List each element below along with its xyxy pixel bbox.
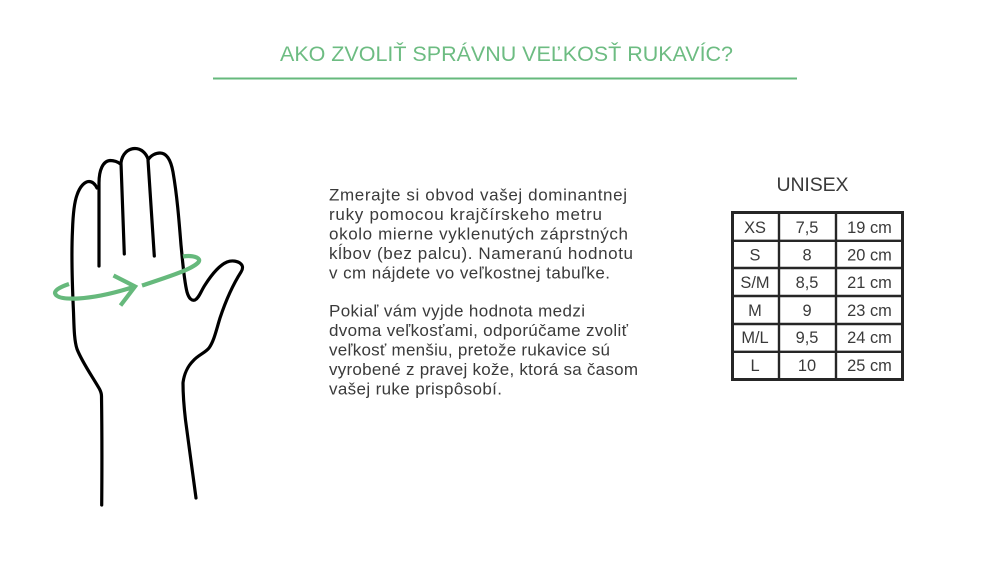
row M: M [748,302,762,320]
row M/L: 9,5 [796,329,818,347]
text block: size advice: veľkosť menšiu, pretože rukavice sú [329,340,610,360]
text block: size advice: vašej ruke prispôsobí. [329,380,502,398]
row XS: 7,5 [796,219,818,237]
row L: L [750,357,760,375]
row M [748,302,892,320]
text block: size advice: dvoma veľkosťami, odporúčame zvoliť [329,321,629,340]
row S [750,246,892,264]
hand outline [72,148,243,505]
table grid [732,212,903,380]
title underline [213,78,797,80]
text block: measuring instructions: Zmerajte si obvod vašej dominantnej [329,186,627,204]
title: AKO ZVOLIŤ SPRÁVNU VEĽKOSŤ RUKAVÍC? [280,41,733,66]
size table [732,212,903,380]
row S: 20 cm [847,246,892,264]
text block: measuring instructions: v cm nájdete vo veľkostnej tabuľke. [329,264,610,282]
row S: 8 [802,246,812,264]
row XS: 19 cm [847,219,892,237]
row XS: XS [744,219,766,237]
row S/M: 8,5 [796,274,818,292]
table heading: UNISEX [776,174,848,196]
text block: size advice: vyrobené z pravej kože, ktorá sa časom [329,360,638,379]
row M: 23 cm [847,302,892,320]
row XS [744,219,892,237]
text block: measuring instructions: ruky pomocou krajčírskeho metru [329,205,602,224]
icon: hand with measuring tape [55,148,242,505]
text block: measuring instructions [329,186,633,282]
row M: 9 [802,302,812,320]
row M/L: M/L [741,329,769,347]
row M/L: 24 cm [847,329,892,347]
row S/M: S/M [740,274,770,292]
measuring tape [55,256,199,306]
text block: measuring instructions: okolo mierne vyklenutých záprstných [329,224,628,244]
row L: 25 cm [847,357,892,375]
row S/M [740,274,892,292]
text block: size advice [329,302,638,398]
row L: 10 [798,357,816,375]
text block: size advice: Pokiaľ vám vyjde hodnota medzi [329,302,585,320]
row L [750,357,892,375]
text block: measuring instructions: kĺbov (bez palcu). Nameranú hodnotu [329,244,633,263]
row S/M: 21 cm [847,274,892,292]
row M/L [741,329,892,347]
row S: S [750,246,761,264]
